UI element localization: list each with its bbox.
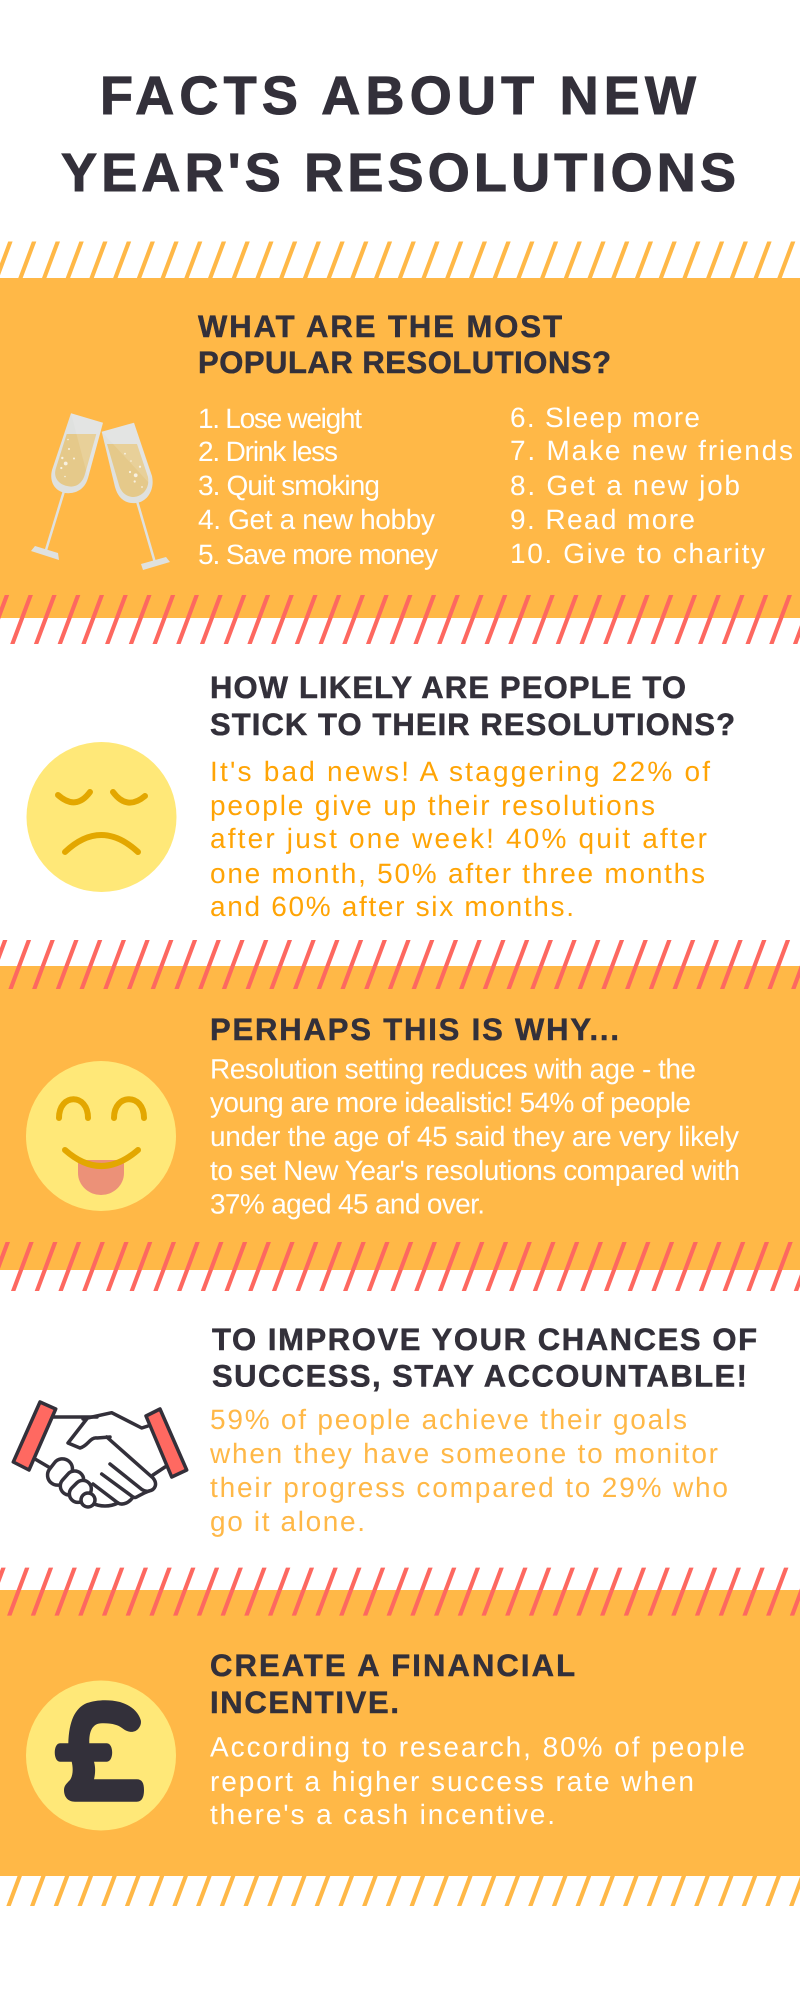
list: resolutions 1 to 5: 1. Lose weight	[198, 403, 362, 434]
icon: smiling face with tongue	[26, 1061, 176, 1211]
text: bad news: and 60% after six months.	[210, 891, 574, 922]
text: monitor progress: go it alone.	[210, 1506, 365, 1537]
text: bad news: one month, 50% after three months	[210, 858, 705, 889]
icon: champagne glasses	[31, 413, 170, 570]
text: age	[210, 1054, 740, 1220]
list: resolutions 1 to 5: 3. Quit smoking	[198, 470, 380, 501]
heading: financial incentive	[210, 1648, 575, 1720]
text: monitor progress: their progress compared to 29% who	[210, 1472, 728, 1503]
panel: stay accountable	[13, 1322, 757, 1537]
heading: perhaps: PERHAPS THIS IS WHY...	[210, 1012, 619, 1047]
title: YEAR'S RESOLUTIONS	[61, 143, 736, 203]
text: bad news: people give up their resolutions	[210, 790, 655, 821]
title	[61, 66, 736, 203]
list: resolutions 6 to 10	[510, 402, 793, 569]
text: cash incentive	[210, 1732, 745, 1830]
list: resolutions 1 to 5: 4. Get a new hobby	[198, 504, 435, 535]
text: monitor progress	[209, 1404, 728, 1537]
text: cash incentive: there's a cash incentive.	[210, 1799, 555, 1830]
list: resolutions 1 to 5: 5. Save more money	[198, 539, 438, 570]
list: resolutions 6 to 10: 9. Read more	[510, 504, 695, 535]
panel: perhaps this is why	[0, 964, 800, 1270]
panel: most popular resolutions	[0, 260, 800, 620]
heading: how likely: HOW LIKELY ARE PEOPLE TO	[210, 670, 686, 705]
text: age: under the age of 45 said they are very likely	[210, 1121, 739, 1152]
text: bad news: It's bad news! A staggering 22% of	[210, 756, 710, 787]
icon: sad face	[26, 742, 176, 892]
heading: stay accountable: TO IMPROVE YOUR CHANCES OF	[212, 1322, 757, 1357]
icon: handshake	[13, 1402, 187, 1507]
list: resolutions 6 to 10: 7. Make new friends	[510, 435, 793, 466]
text: monitor progress: 59% of people achieve their goals	[210, 1404, 687, 1435]
text: bad news: after just one week! 40% quit after	[210, 823, 707, 854]
heading: most popular	[198, 309, 611, 380]
text: bad news	[210, 756, 710, 922]
list: resolutions 1 to 5: 2. Drink less	[198, 436, 338, 467]
text: cash incentive: report a higher success rate when	[210, 1766, 694, 1797]
text: age: to set New Year's resolutions compared with	[210, 1155, 740, 1186]
text: cash incentive: According to research, 80% of people	[210, 1732, 745, 1762]
text: age: young are more idealistic! 54% of people	[210, 1087, 691, 1118]
panel: how likely to stick	[26, 670, 735, 922]
heading: financial incentive: INCENTIVE.	[210, 1685, 399, 1720]
text: monitor progress: when they have someone to monitor	[209, 1438, 718, 1469]
heading: most popular: WHAT ARE THE MOST	[198, 309, 562, 344]
text: age: Resolution setting reduces with age - the	[210, 1054, 696, 1084]
heading: stay accountable	[212, 1322, 757, 1394]
list: resolutions 6 to 10: 8. Get a new job	[510, 470, 740, 501]
list: resolutions 6 to 10: 10. Give to charity	[510, 538, 765, 569]
text: age: 37% aged 45 and over.	[210, 1188, 485, 1220]
list: resolutions 1 to 5	[198, 403, 438, 570]
heading: stay accountable: SUCCESS, STAY ACCOUNTABLE!	[212, 1358, 747, 1394]
heading: how likely	[210, 670, 735, 742]
heading: how likely: STICK TO THEIR RESOLUTIONS?	[210, 707, 735, 742]
list: resolutions 6 to 10: 6. Sleep more	[510, 402, 700, 433]
heading: most popular: POPULAR RESOLUTIONS?	[198, 345, 611, 380]
title: FACTS ABOUT NEW	[100, 66, 696, 126]
icon: pound coin	[26, 1680, 176, 1830]
heading: financial incentive: CREATE A FINANCIAL	[210, 1648, 575, 1683]
panel: financial incentive	[0, 1590, 800, 1888]
